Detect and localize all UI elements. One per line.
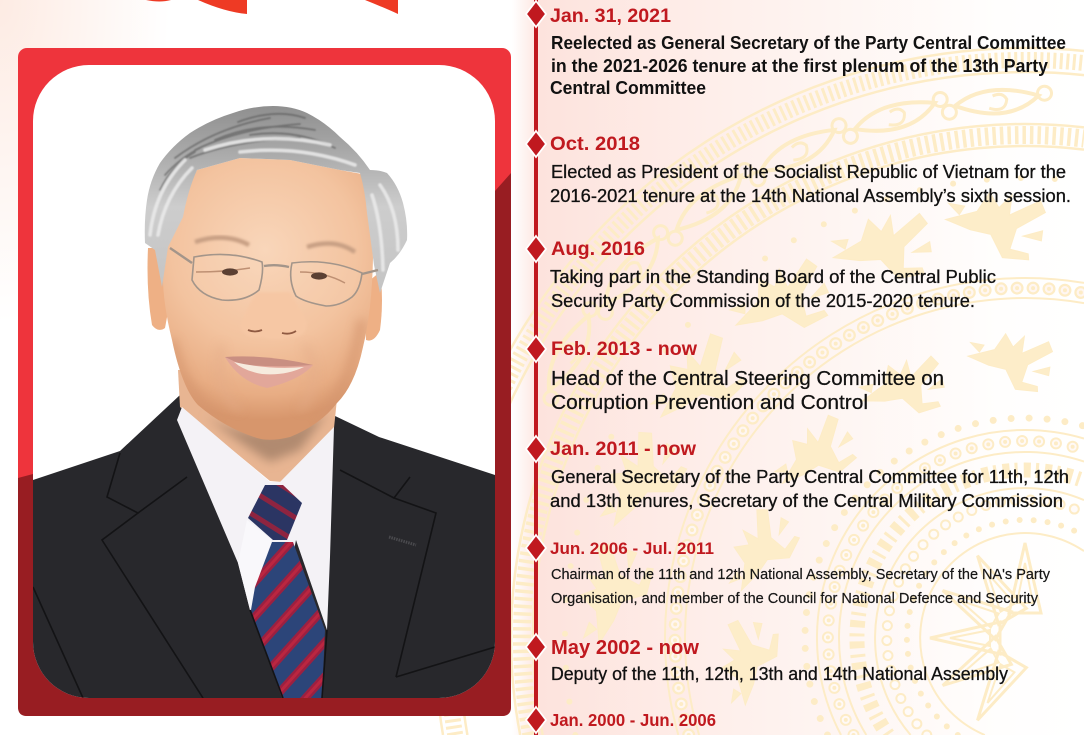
nose [256, 294, 281, 298]
shirt [177, 407, 334, 630]
shirt placket shade [238, 563, 250, 610]
suit jacket [33, 395, 495, 698]
event: Jan. 31, 2021 [550, 6, 1066, 98]
event: Jan. 2000 - Jun. 2006: Jan. 2000 - Jun. 2006 [550, 710, 716, 730]
event: Jan. 31, 2021: Jan. 31, 2021 [550, 6, 671, 27]
event: May 2002 - now [551, 637, 1008, 684]
cheek shading [172, 319, 367, 404]
portrait panel [18, 48, 511, 716]
event: Feb. 2013 - now: Feb. 2013 - now [551, 339, 697, 360]
event: Aug. 2016: Security Party Commission of the 2015-2020 tenure. [551, 291, 975, 311]
event: Jun. 2006 - Jul. 2011: Organisation, and member of the Council for National Defence and Security [551, 591, 1039, 607]
event: Oct. 2018: Oct. 2018 [550, 134, 640, 155]
top ribbon decoration [146, 0, 398, 14]
ears [148, 248, 382, 341]
event: Jan. 31, 2021: Central Committee [550, 78, 706, 98]
eyeglasses [170, 248, 378, 306]
facial features [195, 238, 355, 388]
event: Jan. 2011 - now [550, 439, 1069, 511]
portrait frame [18, 48, 511, 716]
event: Jan. 2011 - now: Jan. 2011 - now [550, 439, 696, 460]
event: Jun. 2006 - Jul. 2011: Chairman of the 11th and 12th National Assembly, Secretary of the NA's Party [551, 567, 1051, 583]
hair [145, 106, 407, 293]
event: Oct. 2018: 2016-2021 tenure at the 14th National Assembly’s sixth session. [550, 186, 1071, 206]
event: Jan. 31, 2021: in the 2021-2026 tenure at the first plenum of the 13th Party [551, 56, 1048, 76]
event: Jun. 2006 - Jul. 2011: Jun. 2006 - Jul. 2011 [550, 540, 714, 558]
event: Oct. 2018 [550, 134, 1071, 206]
event: May 2002 - now: Deputy of the 11th, 12th, 13th and 14th National Assembly [551, 664, 1008, 684]
eyes [196, 268, 345, 283]
eyebrows [195, 238, 355, 252]
event: Aug. 2016 [550, 239, 996, 311]
event: Feb. 2013 - now: Corruption Prevention and Control [551, 392, 868, 414]
event: Oct. 2018: Elected as President of the Socialist Republic of Vietnam for the [551, 162, 1066, 182]
mouth [225, 357, 313, 388]
jacket lapels [33, 453, 495, 698]
timeline spine [534, 0, 538, 735]
timeline diamonds [526, 1, 546, 733]
background bronze drum pattern [435, 48, 1084, 735]
event: Feb. 2013 - now [551, 339, 944, 414]
portrait photo [33, 65, 495, 698]
face [163, 158, 373, 440]
event: Aug. 2016: Aug. 2016 [551, 239, 645, 260]
event: Aug. 2016: Taking part in the Standing Board of the Central Public [550, 267, 996, 287]
event: Jan. 2011 - now: General Secretary of the Party Central Committee for 11th, 12th [551, 467, 1069, 487]
event: Feb. 2013 - now: Head of the Central Steering Committee on [551, 368, 944, 390]
hair streaks [150, 114, 398, 270]
event: Jun. 2006 - Jul. 2011 [550, 540, 1051, 607]
event: Jan. 2011 - now: and 13th tenures, Secretary of the Central Military Commission [550, 491, 1063, 511]
event: Jan. 31, 2021: Reelected as General Secretary of the Party Central Committee [551, 33, 1066, 53]
event: May 2002 - now: May 2002 - now [551, 637, 699, 659]
neck [178, 370, 336, 482]
necktie [248, 485, 325, 698]
